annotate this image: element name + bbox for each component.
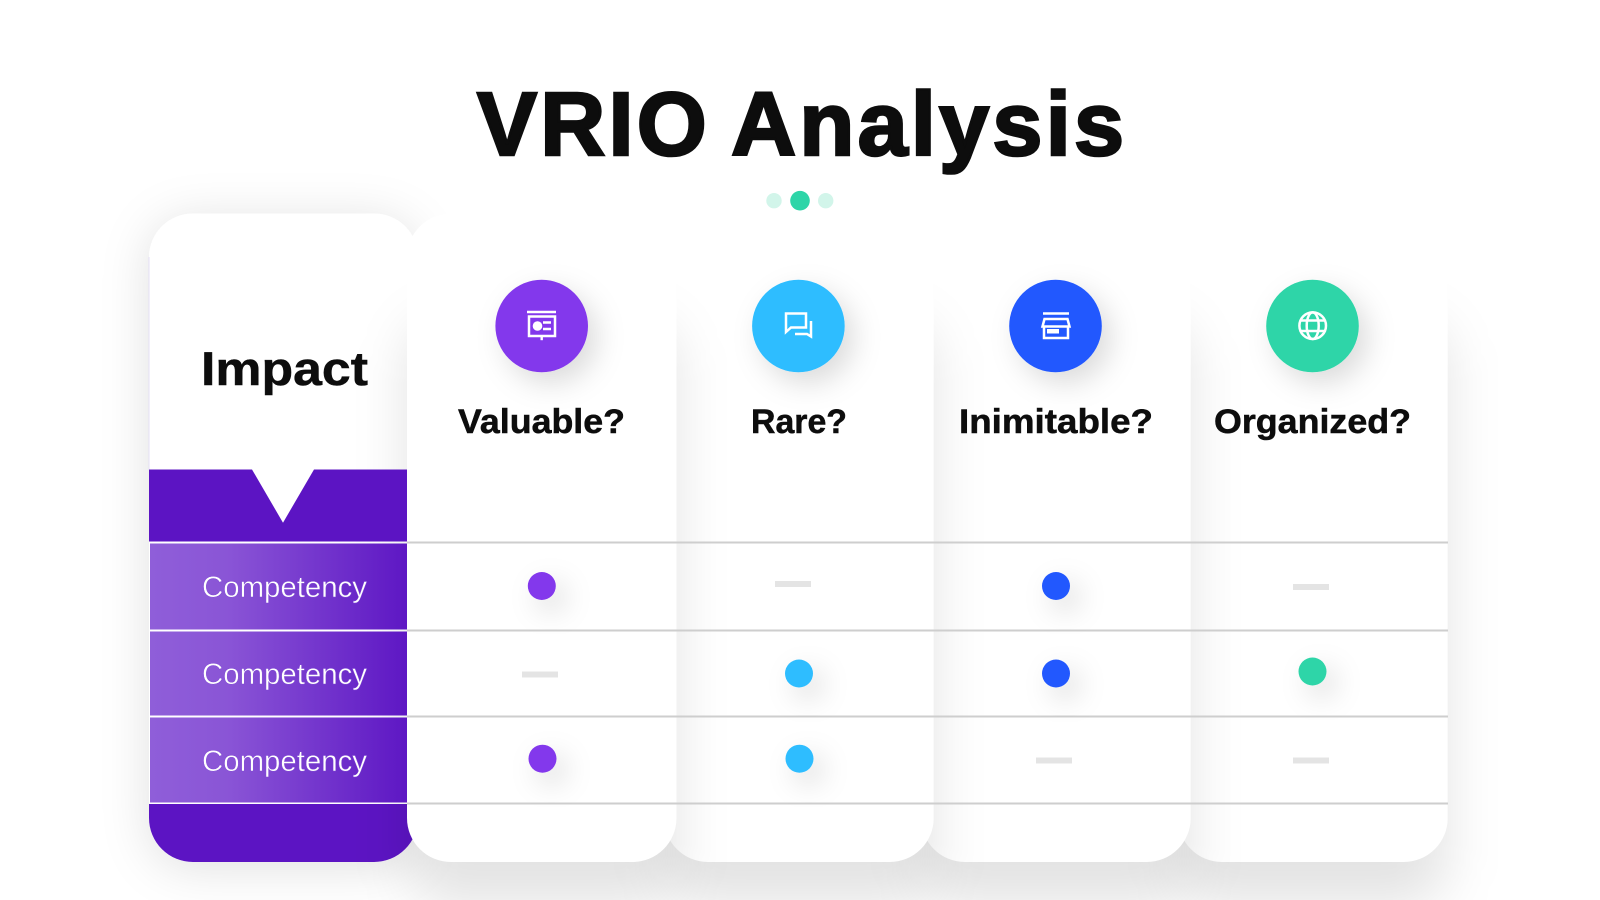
panel: rare column (664, 214, 934, 862)
panel: inimitable column (921, 214, 1191, 862)
heading: impact: Impact (201, 342, 368, 395)
title: VRIO Analysis (477, 75, 1124, 175)
icon: rare chat bubbles (752, 280, 845, 372)
heading: valuable: Valuable? (458, 403, 625, 441)
icon: inimitable box (1009, 280, 1102, 372)
panel: impact card background (149, 214, 418, 862)
row 2 markers (522, 658, 1326, 688)
heading: rare: Rare? (751, 403, 847, 441)
heading: inimitable: Inimitable? (959, 403, 1153, 441)
row labels: Competency (202, 745, 367, 778)
icon: organized globe (1266, 280, 1359, 372)
row labels (150, 544, 407, 802)
row labels: Competency (202, 658, 367, 691)
icon: valuable presentation (495, 280, 588, 372)
row 3 markers (528, 745, 1329, 773)
row 1 markers (528, 572, 1329, 600)
panel: valuable column (407, 214, 676, 862)
pagination dots (766, 191, 833, 210)
table row lines (407, 542, 1448, 804)
panel: organized column (1178, 214, 1448, 862)
impact header band with notch (149, 470, 407, 542)
heading: organized: Organized? (1214, 403, 1411, 441)
row labels: Competency (202, 571, 367, 604)
